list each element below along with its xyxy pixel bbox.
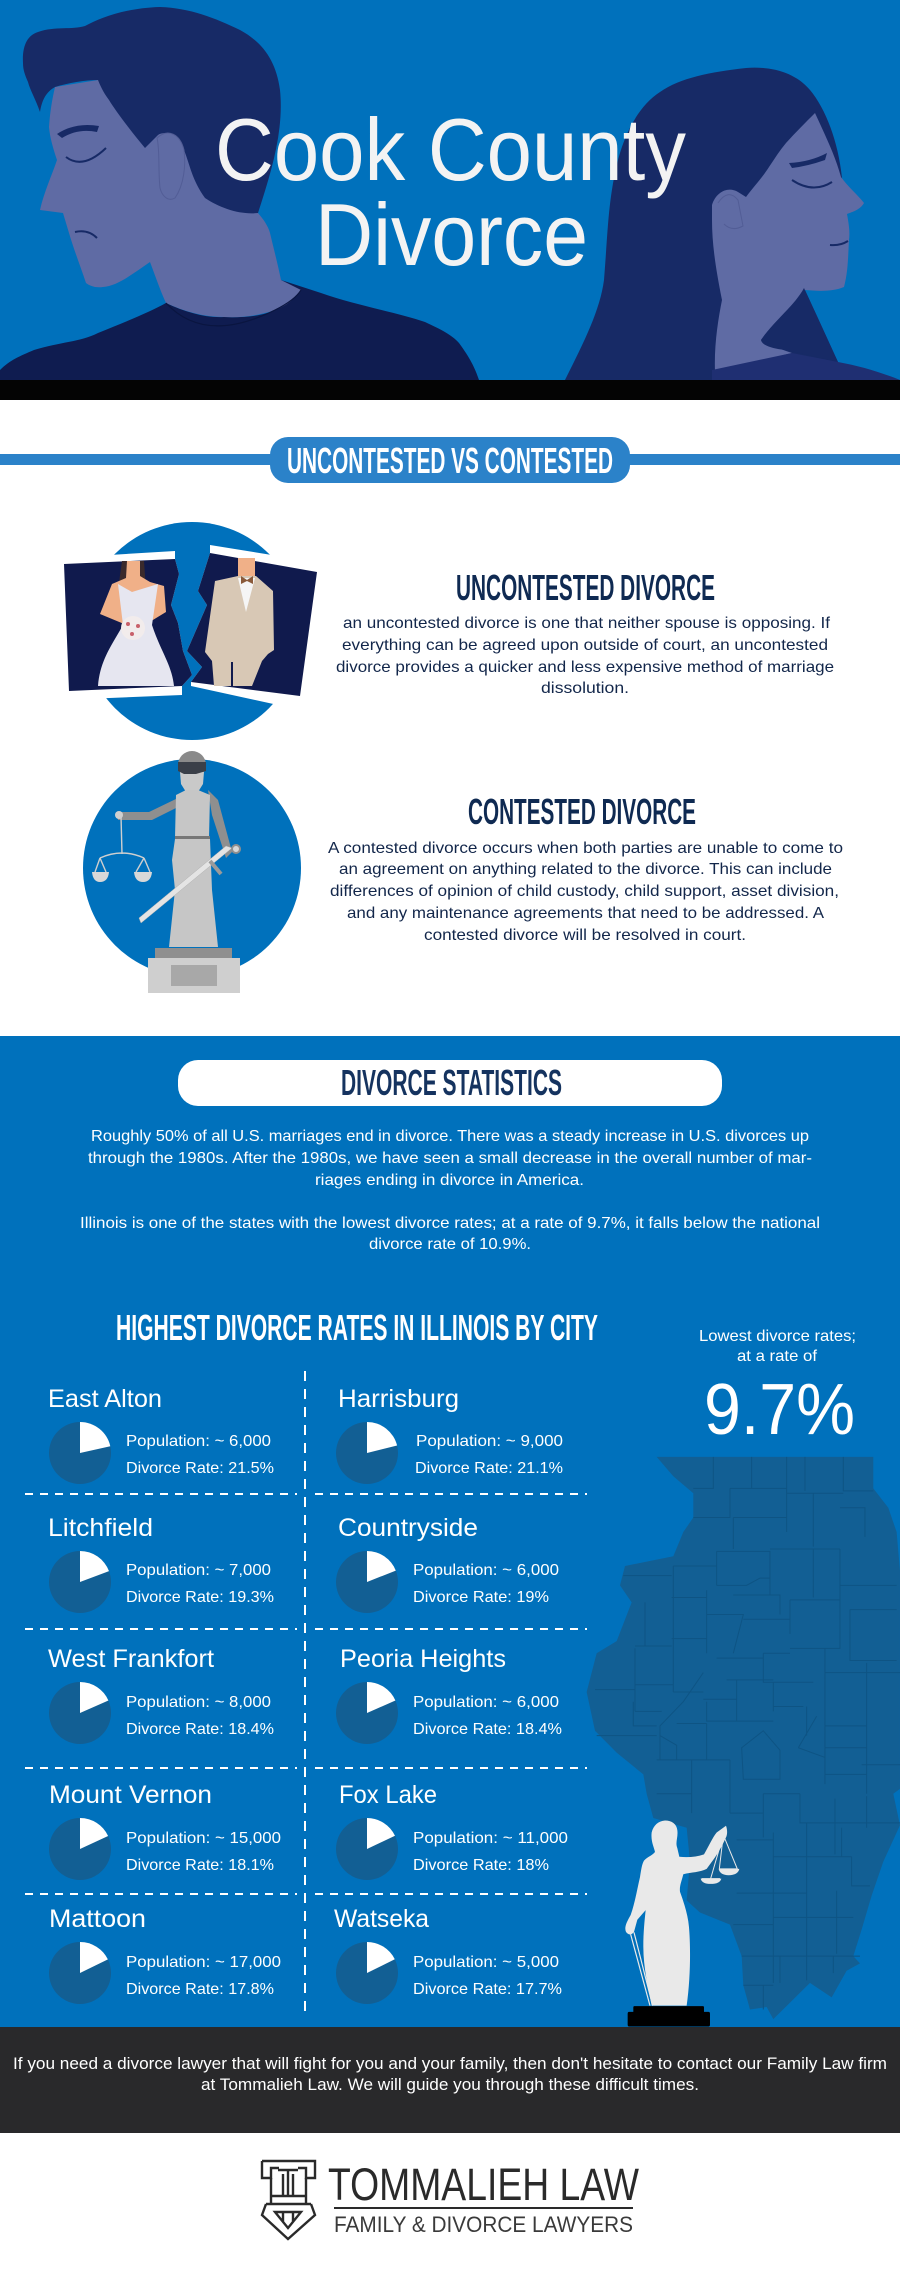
city: West Frankfort: Population: ~ 8,000 <box>126 1694 271 1711</box>
city: West Frankfort: West Frankfort <box>48 1645 214 1673</box>
city: East Alton: East Alton <box>48 1385 162 1413</box>
heading: divorce statistics: DIVORCE STATISTICS <box>341 1062 562 1103</box>
city: Peoria Heights: Divorce Rate: 18.4% <box>413 1721 562 1738</box>
city: Countryside <box>336 1514 559 1613</box>
city: Watseka <box>334 1905 562 2004</box>
text block: statistics paragraphs: Illinois is one of the states with the lowest divorce rates; at a rate of 9.7%, it falls below the national <box>80 1215 820 1232</box>
icon: lady justice silhouette <box>625 1820 739 2026</box>
city: East Alton: Population: ~ 6,000 <box>126 1433 271 1450</box>
city: Mattoon: Divorce Rate: 17.8% <box>126 1981 274 1998</box>
city: Mattoon: Mattoon <box>49 1905 146 1933</box>
city: Fox Lake: Fox Lake <box>339 1781 437 1809</box>
city: Peoria Heights: Population: ~ 6,000 <box>413 1694 559 1711</box>
city: East Alton <box>48 1385 274 1484</box>
city: Mattoon <box>49 1905 281 2004</box>
footer call to action: If you need a divorce lawyer that will fight for you and your family, then don't hesitate to contact our Family Law firm <box>13 2054 887 2073</box>
text block: contested divorce: differences of opinion of child custody, child support, asset division, <box>330 883 839 900</box>
city: Harrisburg <box>336 1385 563 1484</box>
section heading: uncontested vs contested: UNCONTESTED VS CONTESTED <box>287 440 613 481</box>
text block: uncontested divorce: dissolution. <box>541 680 629 697</box>
city: Peoria Heights: Peoria Heights <box>340 1645 506 1673</box>
city: West Frankfort <box>48 1645 274 1744</box>
text block: uncontested divorce: everything can be agreed upon outside of court, an uncontested <box>342 637 828 654</box>
city: Watseka: Divorce Rate: 17.7% <box>413 1981 562 1998</box>
text block: statistics paragraphs <box>80 1128 820 1253</box>
footer call to action <box>0 2027 900 2133</box>
callout: lowest divorce rates: 9.7% <box>704 1370 855 1450</box>
city: Fox Lake <box>336 1781 568 1880</box>
text block: contested divorce: and any maintenance agreements that need to be addressed. A <box>347 905 824 922</box>
title: Divorce <box>315 185 588 284</box>
text block: uncontested divorce <box>336 567 834 697</box>
text block: statistics paragraphs: through the 1980s. After the 1980s, we have seen a small decrease in the overall number of mar- <box>88 1150 812 1167</box>
text block: uncontested divorce: an uncontested divorce is one that neither spouse is opposing. If <box>343 615 831 632</box>
icon: lady justice statue <box>83 751 301 993</box>
city: Litchfield: Population: ~ 7,000 <box>126 1562 271 1579</box>
city: Countryside: Population: ~ 6,000 <box>413 1562 559 1579</box>
title <box>215 100 686 284</box>
city: Countryside: Countryside <box>338 1514 478 1542</box>
logo: tommalieh law: FAMILY & DIVORCE LAWYERS <box>334 2212 633 2237</box>
panel: divorce statistics background <box>0 1036 900 2027</box>
city: Litchfield: Divorce Rate: 19.3% <box>126 1589 274 1606</box>
text block: statistics paragraphs: divorce rate of 10.9%. <box>369 1236 531 1253</box>
city: East Alton: Divorce Rate: 21.5% <box>126 1460 274 1477</box>
city: Watseka: Population: ~ 5,000 <box>413 1954 559 1971</box>
callout: lowest divorce rates: Lowest divorce rates; <box>699 1328 856 1345</box>
section heading: uncontested vs contested <box>0 437 900 483</box>
city: Peoria Heights <box>336 1645 562 1744</box>
logo: tommalieh law: TOMMALIEH LAW <box>328 2159 639 2210</box>
city: Mount Vernon: Divorce Rate: 18.1% <box>126 1857 274 1874</box>
city: West Frankfort: Divorce Rate: 18.4% <box>126 1721 274 1738</box>
callout: lowest divorce rates <box>699 1328 856 1450</box>
illinois county map <box>587 1457 900 2019</box>
text block: statistics paragraphs: Roughly 50% of all U.S. marriages end in divorce. There was a steady increase in U.S. divorces up <box>91 1128 809 1145</box>
city: Fox Lake: Population: ~ 11,000 <box>413 1830 568 1847</box>
city: Watseka: Watseka <box>334 1905 429 1933</box>
city: Harrisburg: Population: ~ 9,000 <box>416 1433 563 1450</box>
illustration: woman in profile <box>565 68 900 380</box>
city: Litchfield <box>48 1514 274 1613</box>
city: Harrisburg: Divorce Rate: 21.1% <box>415 1460 563 1477</box>
illustration: man in profile <box>0 7 479 380</box>
city: Mattoon: Population: ~ 17,000 <box>126 1954 281 1971</box>
text block: contested divorce: contested divorce will be resolved in court. <box>424 927 746 944</box>
text block: statistics paragraphs: riages ending in divorce in America. <box>315 1172 584 1189</box>
text block: uncontested divorce: UNCONTESTED DIVORCE <box>456 567 715 608</box>
text block: contested divorce: an agreement on anything related to the divorce. This can include <box>339 861 832 878</box>
hero banner <box>0 0 900 400</box>
icon: column shield <box>262 2161 315 2239</box>
text block: contested divorce <box>328 791 843 944</box>
callout: lowest divorce rates: at a rate of <box>737 1348 818 1365</box>
city: Mount Vernon: Population: ~ 15,000 <box>126 1830 281 1847</box>
city: Harrisburg: Harrisburg <box>338 1385 459 1413</box>
city: Fox Lake: Divorce Rate: 18% <box>413 1857 549 1874</box>
text block: contested divorce: A contested divorce occurs when both parties are unable to come to <box>328 840 843 857</box>
heading: divorce statistics <box>178 1060 722 1106</box>
footer call to action: at Tommalieh Law. We will guide you through these difficult times. <box>201 2075 699 2094</box>
text block: uncontested divorce: divorce provides a quicker and less expensive method of marriage <box>336 659 834 676</box>
city: Countryside: Divorce Rate: 19% <box>413 1589 549 1606</box>
text block: contested divorce: CONTESTED DIVORCE <box>468 791 696 832</box>
title: Cook County <box>215 100 686 199</box>
icon: torn wedding photo <box>60 522 340 740</box>
logo: tommalieh law <box>262 2159 639 2239</box>
city: Mount Vernon <box>49 1781 281 1880</box>
city: Litchfield: Litchfield <box>48 1514 153 1542</box>
city: Mount Vernon: Mount Vernon <box>49 1781 212 1809</box>
